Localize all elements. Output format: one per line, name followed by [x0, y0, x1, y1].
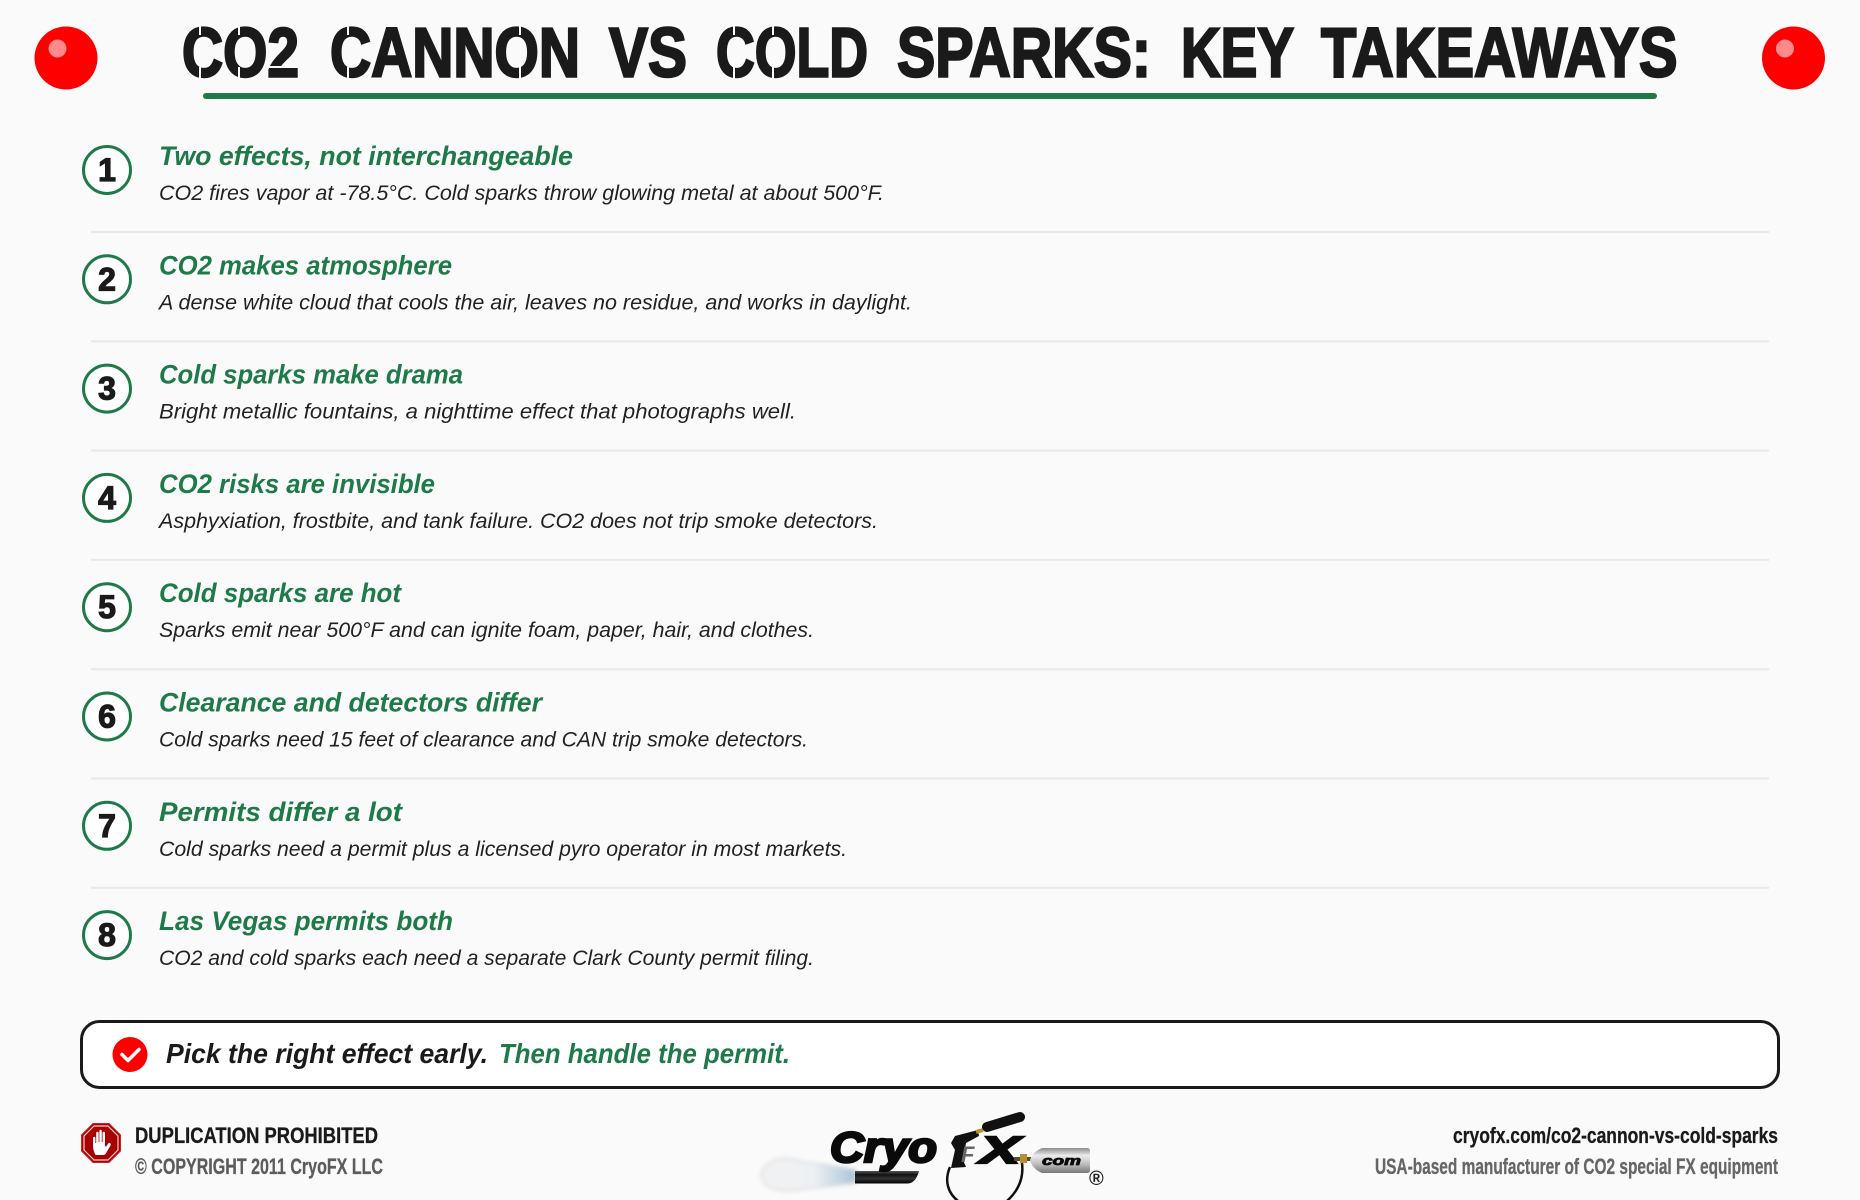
- takeaway 1: Two effects, not interchangeable: [159, 141, 573, 171]
- title: CANNON: [330, 14, 580, 92]
- takeaway 6: [84, 688, 808, 752]
- takeaway 3: Bright metallic fountains, a nighttime effect that photographs well.: [159, 401, 796, 424]
- callout: pick the right effect: [82, 1022, 1778, 1088]
- title: VS: [609, 14, 687, 92]
- hose: [947, 1163, 1022, 1200]
- icon: check mark: [112, 1037, 148, 1072]
- takeaway 4: Asphyxiation, frostbite, and tank failure. CO2 does not trip smoke detectors.: [157, 510, 878, 533]
- title: SPARKS:: [897, 14, 1151, 92]
- callout: pick the right effect: Then handle the permit.: [499, 1038, 790, 1069]
- logo: CryoFX: ®: [1089, 1168, 1104, 1190]
- takeaway 3: 3: [98, 371, 116, 407]
- title: [182, 14, 1678, 92]
- takeaway 5: 5: [98, 589, 116, 625]
- takeaway 2: A dense white cloud that cools the air, leaves no residue, and works in daylight.: [157, 291, 912, 314]
- takeaway 6: 6: [98, 698, 116, 734]
- icon: stop hand: [82, 1124, 120, 1162]
- takeaway 5: Sparks emit near 500°F and can ignite foam, paper, hair, and clothes.: [159, 619, 814, 642]
- footer url and tagline: cryofx.com/co2-cannon-vs-cold-sparks: [1453, 1123, 1778, 1148]
- cold jet cloud: [762, 1159, 856, 1191]
- takeaway 1: CO2 fires vapor at -78.5°C. Cold sparks throw glowing metal at about 500°F.: [159, 182, 884, 205]
- duplication notice: [135, 1123, 383, 1179]
- takeaway 2: CO2 makes atmosphere: [159, 250, 452, 280]
- takeaway 4: 4: [98, 480, 116, 516]
- icon: left red dot: [34, 26, 98, 90]
- title underline: [203, 93, 1657, 99]
- takeaway 3: [84, 360, 796, 424]
- takeaway 4: [84, 469, 878, 533]
- callout: pick the right effect: Pick the right effect early.: [166, 1038, 488, 1069]
- logo: CryoFX: com: [1042, 1153, 1082, 1168]
- takeaway 5: [84, 578, 814, 642]
- takeaway 1: [84, 141, 884, 205]
- duplication notice: DUPLICATION PROHIBITED: [135, 1123, 378, 1148]
- nozzle base: [855, 1171, 919, 1184]
- takeaway 8: [84, 906, 814, 970]
- takeaway 5: Cold sparks are hot: [159, 578, 402, 608]
- tank: [1030, 1148, 1090, 1173]
- gun body: [951, 1130, 979, 1168]
- takeaway 7: Permits differ a lot: [159, 797, 403, 827]
- logo: CryoFX: F: [961, 1142, 975, 1167]
- title: CO2: [182, 14, 299, 92]
- takeaway 4: CO2 risks are invisible: [159, 469, 435, 499]
- title: COLD: [716, 14, 868, 92]
- gun barrel: [987, 1117, 1020, 1127]
- takeaway 2: [84, 250, 912, 314]
- takeaway 8: CO2 and cold sparks each need a separate Clark County permit filing.: [159, 947, 814, 970]
- logo: CryoFX: [762, 1117, 1104, 1200]
- takeaway 3: Cold sparks make drama: [159, 360, 463, 390]
- takeaway 8: 8: [98, 917, 116, 953]
- tank valve: [1014, 1157, 1031, 1161]
- logo: CryoFX: Cryo: [830, 1124, 937, 1172]
- icon: right red dot: [1762, 26, 1825, 90]
- takeaway 8: Las Vegas permits both: [159, 906, 453, 936]
- takeaway 7: Cold sparks need a permit plus a licensed pyro operator in most markets.: [159, 838, 847, 861]
- takeaway 2: 2: [98, 261, 116, 297]
- takeaway 6: Clearance and detectors differ: [159, 688, 543, 718]
- duplication notice: © COPYRIGHT 2011 CryoFX LLC: [135, 1154, 383, 1179]
- takeaway 7: [84, 797, 847, 861]
- footer url and tagline: [1375, 1123, 1778, 1179]
- title: TAKEAWAYS: [1321, 14, 1678, 92]
- logo: CryoFX: X: [977, 1130, 1024, 1172]
- takeaway 1: 1: [98, 152, 116, 188]
- title: KEY: [1181, 14, 1294, 92]
- takeaway 7: 7: [98, 808, 116, 844]
- takeaway 6: Cold sparks need 15 feet of clearance and CAN trip smoke detectors.: [159, 728, 808, 752]
